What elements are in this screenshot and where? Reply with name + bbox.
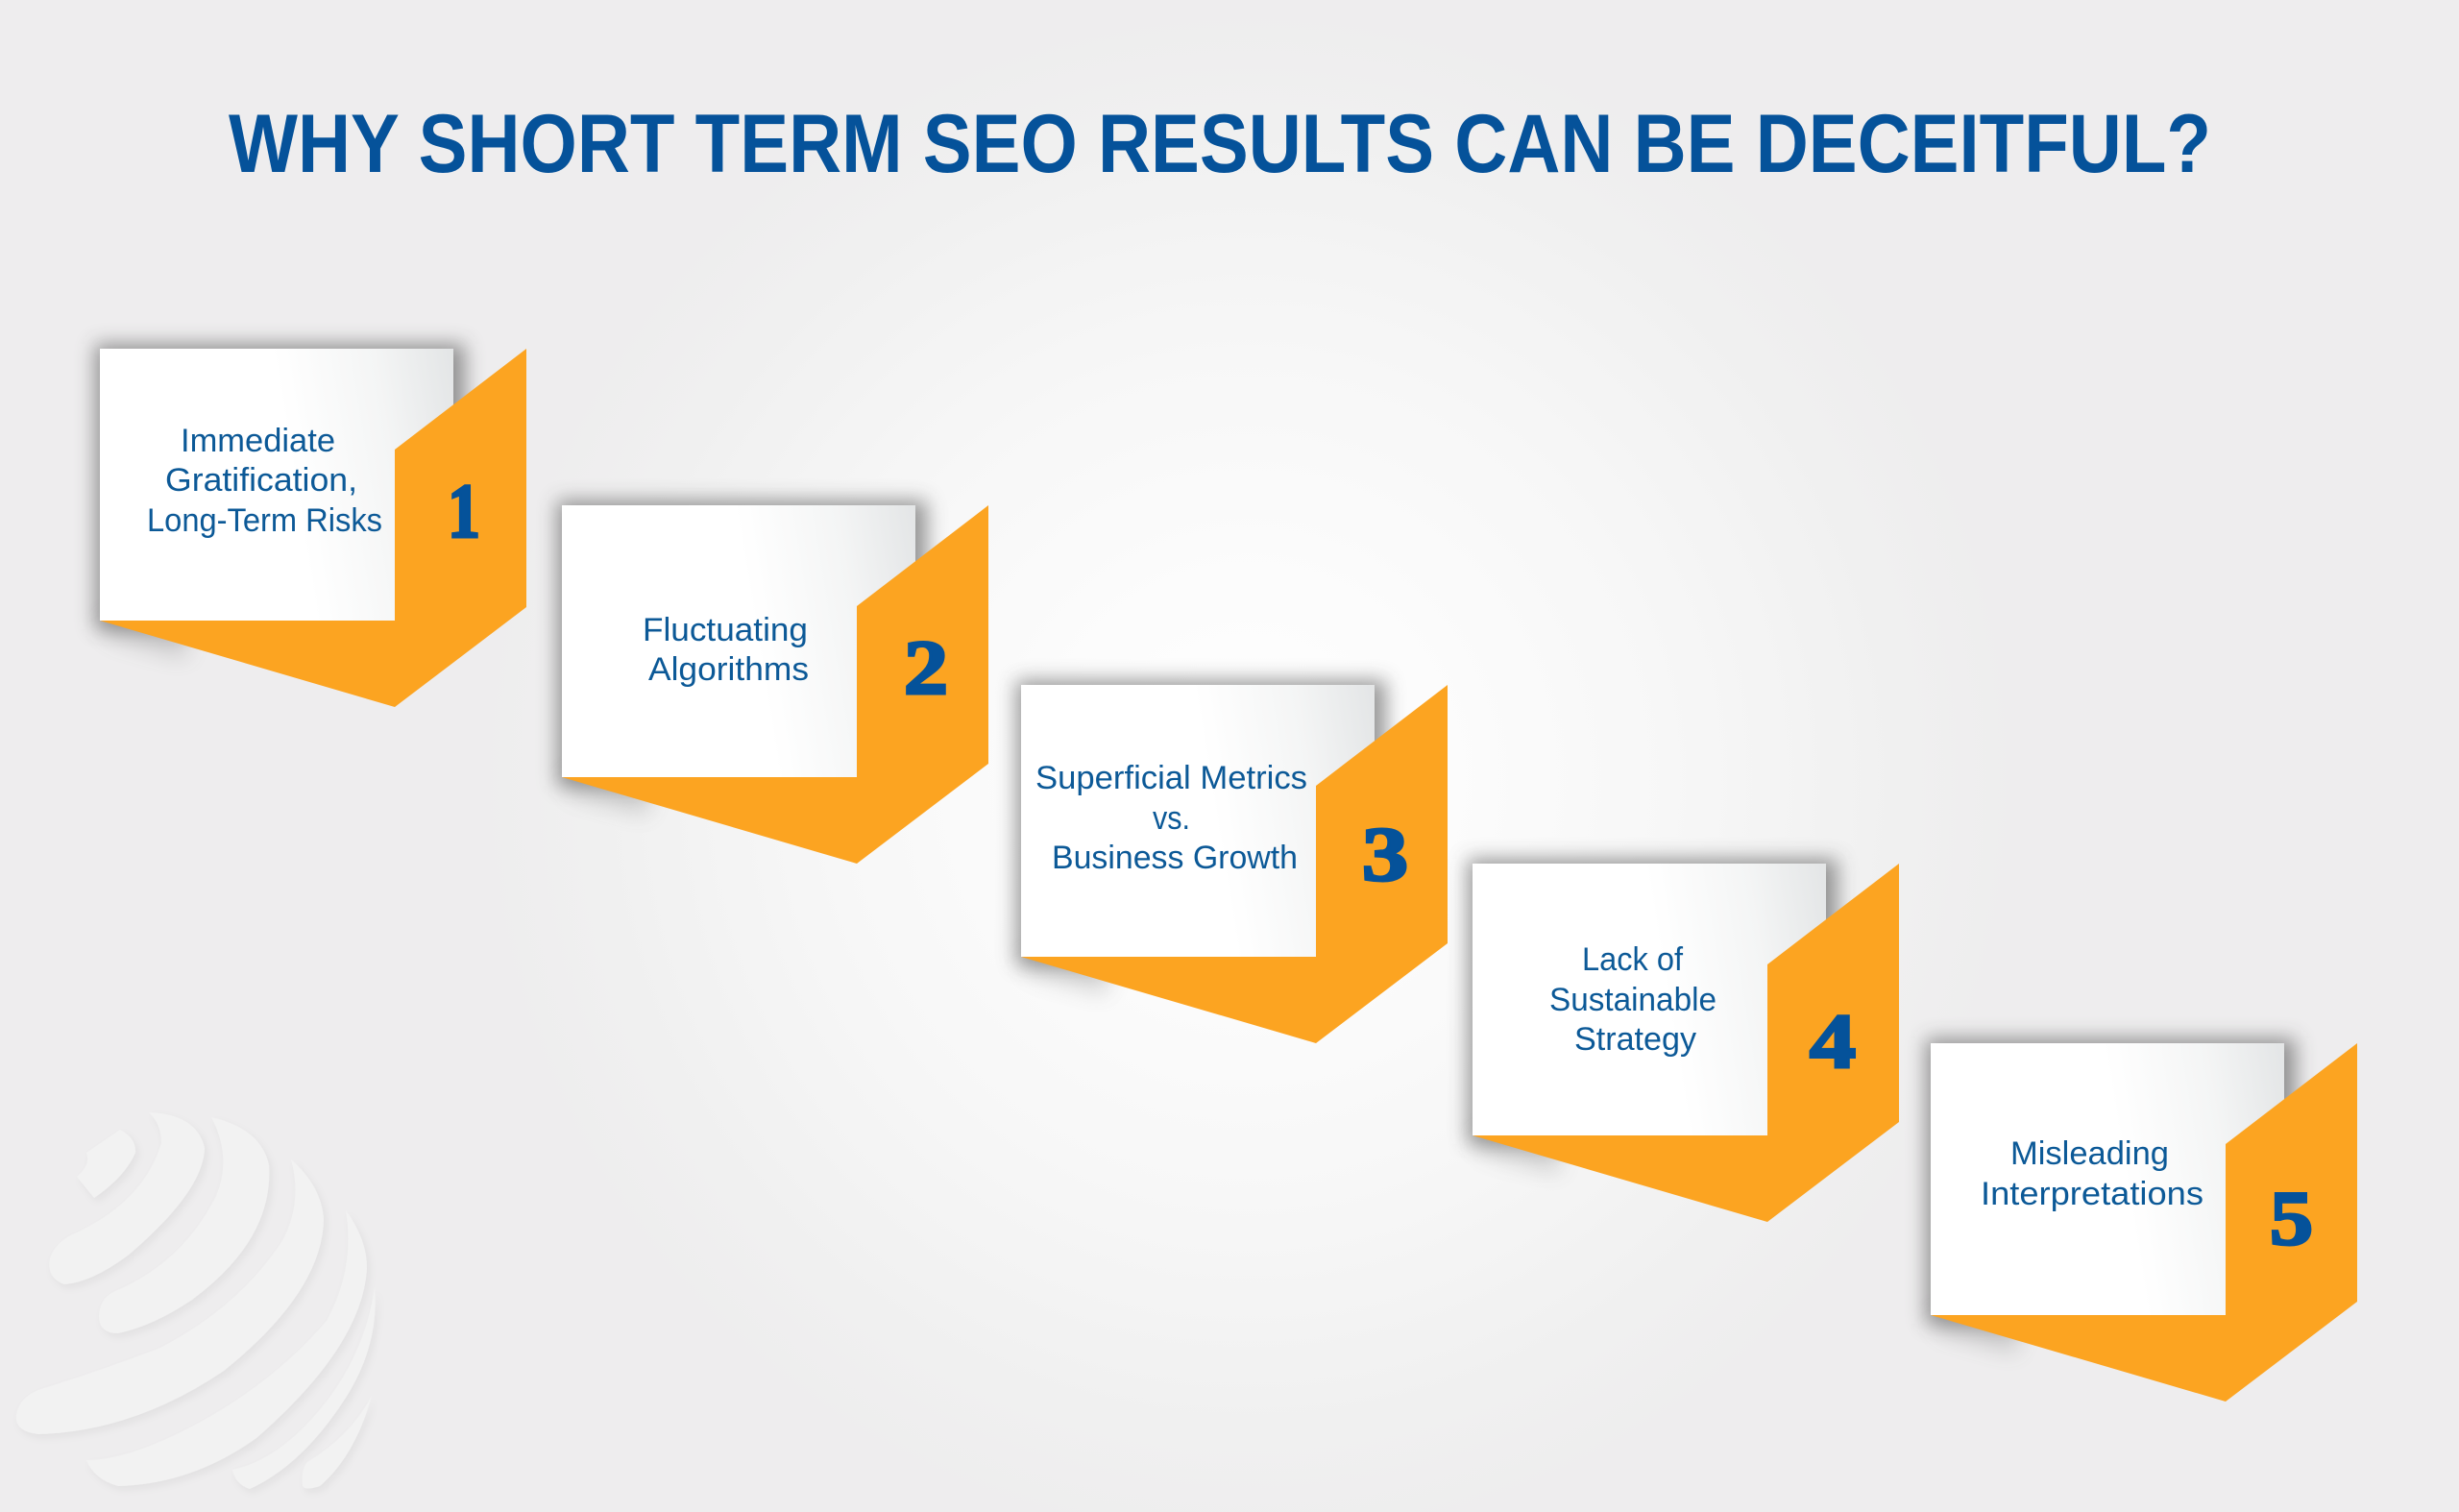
step 4 number: 4	[1810, 1000, 1856, 1085]
step 5	[1926, 1038, 2357, 1402]
title: WHY SHORT TERM SEO RESULTS CAN BE DECEITFUL?	[229, 98, 2211, 190]
step 4 text: Lack of	[1582, 941, 1684, 978]
step 4 text	[1549, 941, 1716, 1058]
step 1 text: Gratification,	[165, 462, 357, 499]
step 3 text	[1035, 760, 1307, 876]
step 3 text: Superficial Metrics	[1035, 760, 1307, 796]
step 3 text: Business Growth	[1052, 840, 1298, 876]
step 1 text: Long-Term Risks	[147, 502, 382, 539]
step 3 number: 3	[1362, 813, 1408, 897]
step 1	[95, 344, 526, 707]
step 2 number: 2	[904, 626, 948, 711]
step 3	[1016, 680, 1448, 1043]
step 5 text: Misleading	[2010, 1135, 2169, 1172]
step 1 number: 1	[448, 470, 480, 554]
step 3 text: vs.	[1153, 800, 1190, 837]
step 5 number: 5	[2270, 1177, 2313, 1261]
step 2	[557, 500, 988, 864]
step 2 text: Fluctuating	[643, 612, 808, 648]
step 1 text: Immediate	[181, 423, 335, 459]
step 4 text: Sustainable	[1549, 982, 1716, 1018]
step 2 text: Algorithms	[648, 651, 809, 688]
step 2 text	[643, 612, 809, 688]
icon: globe watermark	[16, 1112, 376, 1489]
step 5 text: Interpretations	[1981, 1176, 2203, 1212]
step 4	[1468, 859, 1899, 1222]
step 1 text	[147, 423, 382, 539]
step 4 text: Strategy	[1574, 1021, 1696, 1058]
step 5 text	[1981, 1135, 2203, 1212]
